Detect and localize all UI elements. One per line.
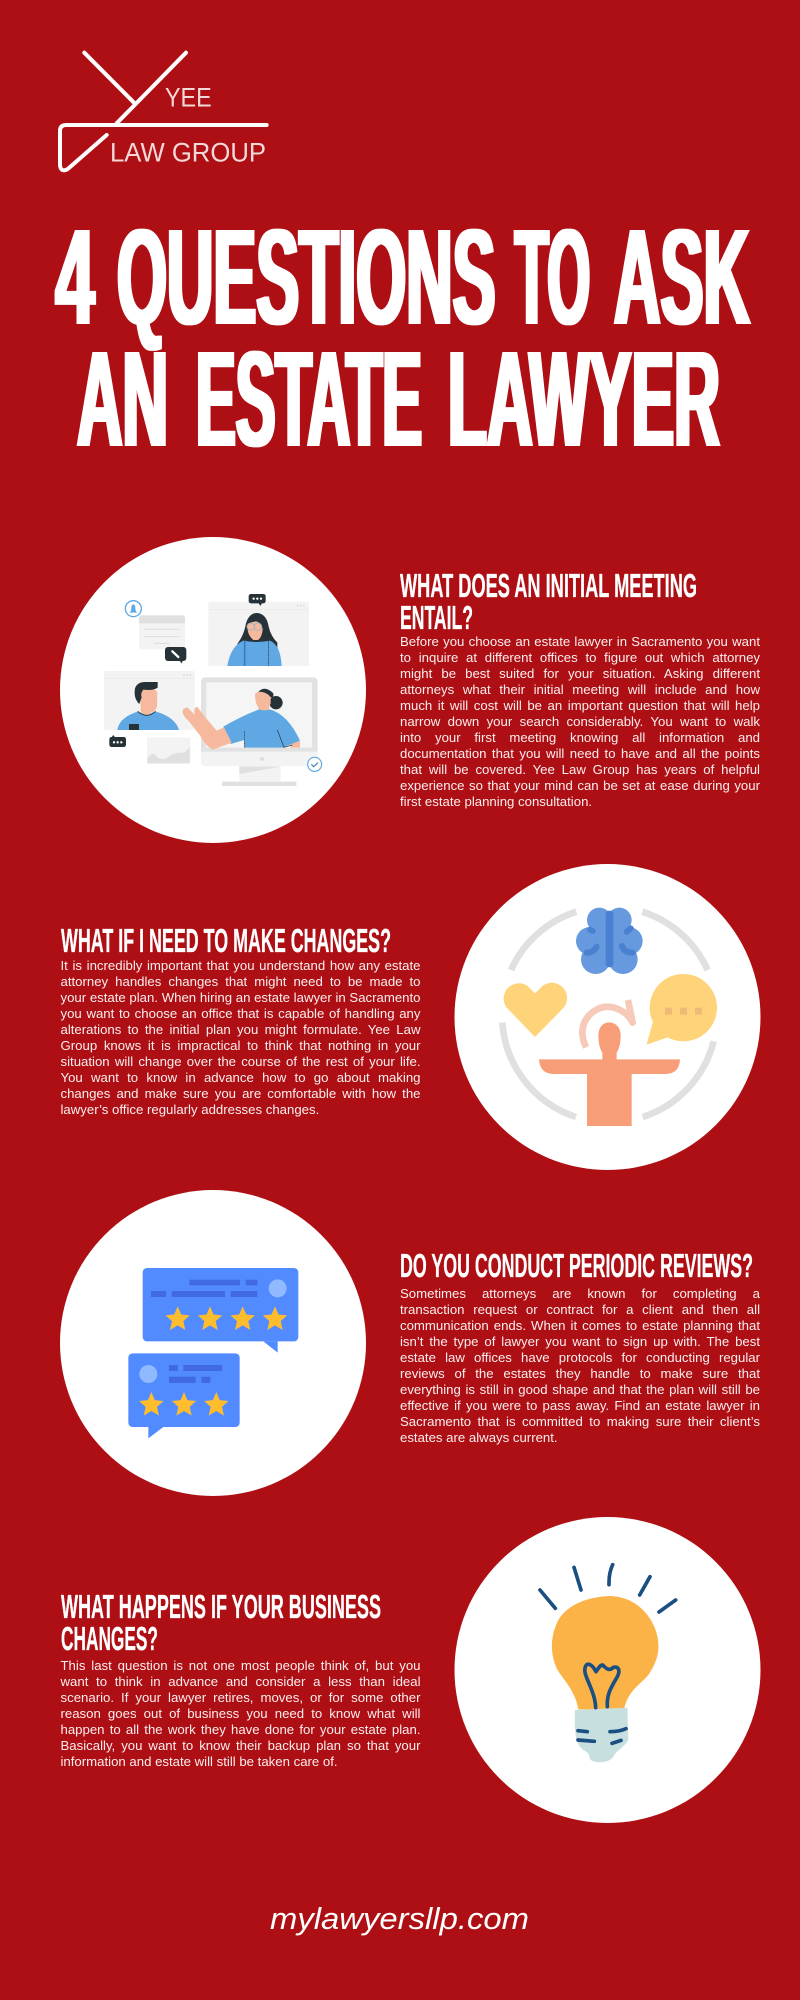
body text: scenario. If your lawyer retires, moves, or for some other bbox=[60, 1690, 420, 1705]
heading: ENTAIL? bbox=[400, 600, 473, 637]
title: 4 bbox=[56, 200, 95, 353]
icon: message card bbox=[139, 615, 185, 649]
icon: heart bbox=[504, 983, 567, 1037]
body text: into your first meeting knowing all information and bbox=[400, 730, 760, 745]
icon: circular arrow bbox=[582, 1000, 633, 1047]
body text: It is incredibly important that you understand how any estate bbox=[60, 958, 420, 973]
illustration: light bulb bbox=[454, 1517, 760, 1823]
woman video window bbox=[208, 594, 309, 666]
body text: estate law offices have protocols for conducting regular bbox=[400, 1350, 760, 1365]
heading: WHAT HAPPENS IF YOUR BUSINESS bbox=[61, 1589, 381, 1626]
panel: making changes bbox=[60, 864, 760, 1170]
body text: Sacramento that is committed to making sure their client’s bbox=[400, 1414, 760, 1429]
body text: attorney handles changes that might need to be made to bbox=[60, 974, 420, 989]
illustration: video meeting bbox=[60, 537, 366, 843]
heading bbox=[400, 568, 697, 637]
icon: chat bubble bbox=[109, 735, 126, 747]
rays and filament bbox=[540, 1565, 676, 1743]
icon: chart card bbox=[147, 737, 190, 764]
body text: attorneys what their initial meeting will include and how bbox=[400, 682, 760, 697]
body text: reviews of the estates they handle to make sure that bbox=[400, 1366, 760, 1381]
body text: estates are always current. bbox=[400, 1430, 558, 1445]
body text: changes and make sure you are comfortable with how the bbox=[60, 1086, 420, 1101]
body text: want to think in advance and consider a less than ideal bbox=[60, 1674, 420, 1689]
body text: documentation that you will need to have and all the points bbox=[400, 746, 760, 761]
illustration: review bubbles bbox=[60, 1190, 366, 1496]
logo: Yee Law Group bbox=[58, 50, 269, 172]
bulb glass bbox=[552, 1596, 658, 1709]
icon: phone bubble bbox=[165, 647, 186, 663]
heading bbox=[60, 1589, 381, 1658]
title bbox=[54, 200, 752, 475]
body text bbox=[400, 634, 760, 809]
body text: isn’t the type of lawyer you want to sign up with. The best bbox=[400, 1334, 760, 1349]
body text: transaction request or contract for a client and then all bbox=[400, 1302, 760, 1317]
body text: Basically, you want to know their backup plan so that your bbox=[60, 1738, 420, 1753]
heading: WHAT IF I NEED TO MAKE CHANGES? bbox=[61, 923, 391, 960]
bulb base bbox=[575, 1708, 628, 1762]
body text: might be best suited for your situation. Asking different bbox=[400, 666, 760, 681]
heading: CHANGES? bbox=[61, 1621, 158, 1658]
monitor with presenter bbox=[183, 677, 318, 786]
illustration: person with brain, heart and speech bbox=[454, 864, 760, 1170]
body text: communication ends. When it comes to estate planning that bbox=[400, 1318, 760, 1333]
body text: to inquire at different offices to figure out which attorney bbox=[400, 650, 760, 665]
body text bbox=[60, 958, 421, 1117]
panel: initial meeting bbox=[60, 537, 760, 843]
body text: much it will cost will be an important question that will help bbox=[400, 698, 760, 713]
body text: narrow down your search considerably. You want to walk bbox=[400, 714, 760, 729]
body text: Group knows it is impractical to think that nothing in your bbox=[60, 1038, 420, 1053]
review bubble: four stars bbox=[143, 1268, 298, 1353]
footer website: mylawyersllp.com bbox=[270, 1901, 529, 1936]
title: AN bbox=[77, 322, 168, 475]
body text: effective if you were to pass away. Find an estate lawyer in bbox=[400, 1398, 760, 1413]
body text: Sometimes attorneys are known for completing a bbox=[400, 1286, 760, 1301]
body text: situation will change over the course of the rest of your life. bbox=[60, 1054, 420, 1069]
icon: person bbox=[539, 1022, 680, 1126]
panel: periodic reviews bbox=[60, 1190, 760, 1496]
body text: everything is still in good shape and that the plan will still be bbox=[400, 1382, 760, 1397]
body text: reason goes out of business you need to know what will bbox=[60, 1706, 420, 1721]
body text: You want to know in advance how to go about making bbox=[60, 1070, 420, 1085]
review bubble: three stars bbox=[128, 1353, 240, 1438]
icon: brain bbox=[576, 908, 643, 974]
title: TO bbox=[515, 200, 590, 353]
body text bbox=[60, 1658, 420, 1769]
title: ESTATE bbox=[196, 322, 422, 475]
body text: This last question is not one most people think of, but you bbox=[60, 1658, 420, 1673]
body text: lawyer’s office regularly addresses changes. bbox=[60, 1102, 319, 1117]
body text: Before you choose an estate lawyer in Sacramento you want bbox=[400, 634, 760, 649]
body text: experience so that your mind can be set at ease during your bbox=[400, 778, 760, 793]
gray ring arcs bbox=[502, 912, 714, 1117]
body text: your estate plan. When hiring an estate lawyer in Sacramento bbox=[60, 990, 420, 1005]
body text: that will be covered. Yee Law Group has years of helpful bbox=[400, 762, 760, 777]
logo: Yee Law Group: LAW GROUP bbox=[110, 138, 266, 168]
icon: check badge bbox=[308, 757, 322, 771]
body text: alterations to the initial plan you might formulate. Yee Law bbox=[60, 1022, 420, 1037]
panel: business changes bbox=[60, 1517, 760, 1823]
icon: notification bell bbox=[125, 601, 141, 617]
man video window bbox=[104, 671, 195, 730]
body text bbox=[400, 1286, 760, 1445]
icon: speech bubble bbox=[647, 974, 717, 1045]
logo: Yee Law Group: YEE bbox=[165, 83, 212, 113]
body text: you want to choose an office that is capable of handling any bbox=[60, 1006, 420, 1021]
body text: information and estate will still be taken care of. bbox=[60, 1754, 338, 1769]
body text: first estate planning consultation. bbox=[400, 794, 592, 809]
body text: happen to all the work they have done for your estate plan. bbox=[60, 1722, 420, 1737]
